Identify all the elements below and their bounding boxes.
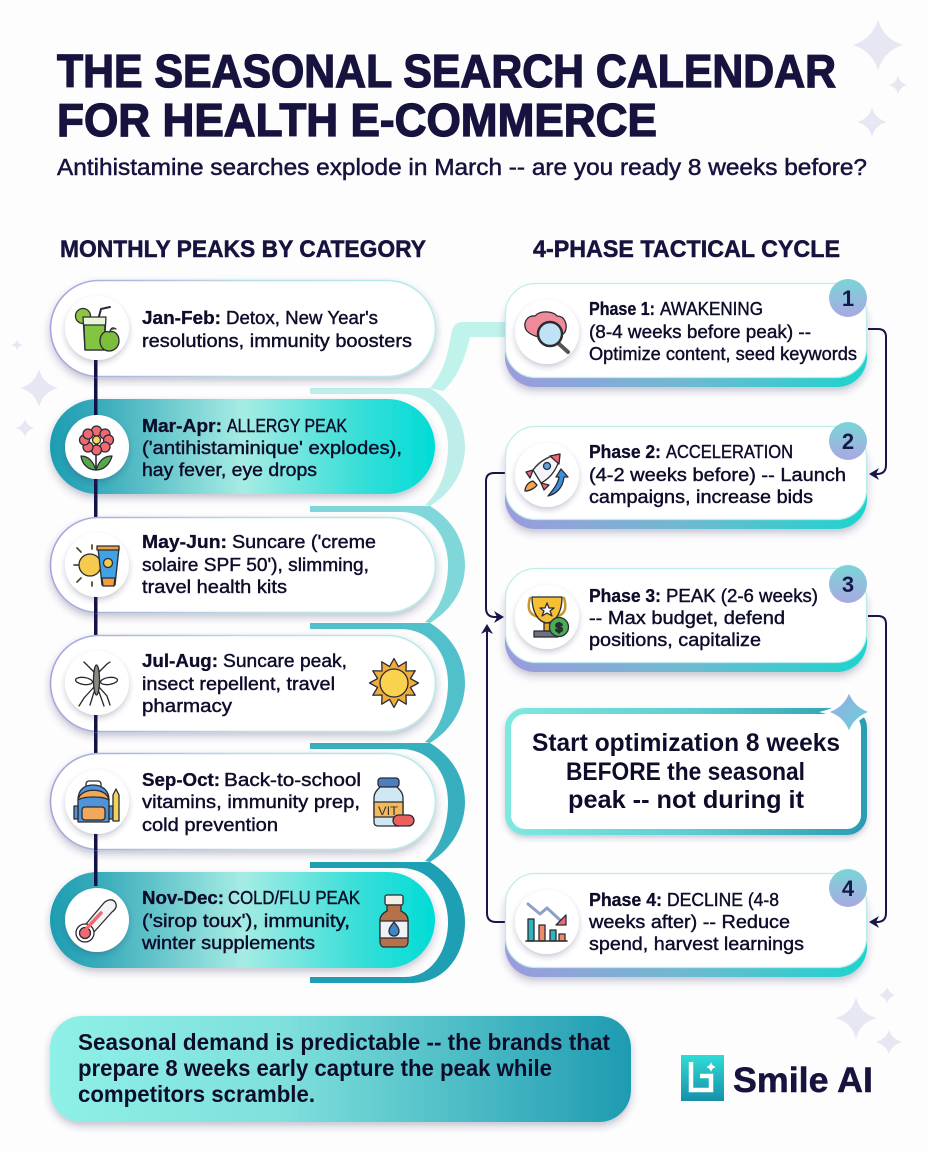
text: Nov-Dec: [141, 887, 361, 953]
text: Sep-Oct: cold prevention: [142, 814, 278, 835]
text: phase 4: spend, harvest learnings: [589, 933, 804, 954]
text: phase 3: PEAK (2-6 weeks): [666, 585, 818, 606]
text: May-Jun: travel health kits: [142, 576, 287, 597]
text: phase 2: ACCELERATION: [666, 441, 793, 462]
timeline line: [94, 355, 98, 885]
icon: mosquito: [75, 662, 118, 706]
text: phase 1: Optimize content, seed keywords: [589, 343, 857, 364]
connector brackets behind month cards: [310, 322, 505, 983]
panel: May-Jun: [50, 518, 436, 613]
text: Mar-Apr: hay fever, eye drops: [142, 459, 317, 480]
banner text: [78, 1029, 610, 1107]
icon: trophy: $: [555, 620, 563, 635]
text: Jan-Feb: [142, 307, 412, 351]
title: [57, 45, 836, 146]
callout text: BEFORE the seasonal: [566, 758, 805, 786]
text: Sep-Oct: vitamins, immunity prep,: [142, 791, 360, 812]
arrow: phase 1 to phase 2: [868, 329, 886, 480]
arrow: phase 4 back to phase 3: [481, 624, 505, 922]
text: Sep-Oct: [142, 769, 361, 835]
icon: rocket: [525, 454, 568, 496]
icon: trophy: [529, 597, 568, 637]
banner text: Seasonal demand is predictable -- the brands that: [78, 1029, 610, 1055]
badge: 3: 3: [842, 572, 854, 597]
text: phase 2: (4-2 weeks before) -- Launch: [589, 464, 846, 485]
badge: 4: [829, 869, 867, 907]
icon: vitamin bottle: VIT: [378, 804, 399, 818]
heading: tactical cycle: 4-PHASE TACTICAL CYCLE: [533, 236, 840, 263]
text: May-Jun: May-Jun:: [142, 531, 227, 552]
callout text: peak -- not during it: [568, 786, 805, 814]
text: Jan-Feb: resolutions, immunity boosters: [142, 330, 412, 351]
text: Nov-Dec: Nov-Dec:: [142, 887, 224, 908]
arrow: phase 3 to phase 4: [868, 616, 886, 928]
icon: green juice and apple: [76, 307, 119, 351]
text: phase 4: weeks after) -- Reduce: [588, 911, 790, 932]
text: Jul-Aug: Suncare peak,: [223, 650, 347, 671]
logo: Smile AI: Smile AI: [733, 1061, 873, 1100]
arrow: phase 2 to phase 3: [486, 473, 505, 623]
panel: phase 1: [505, 279, 867, 387]
text: May-Jun: Suncare ('creme: [232, 531, 376, 552]
icon: brain and magnifier: [525, 312, 568, 352]
icon: sparkle: [825, 689, 873, 735]
text: phase 1: [589, 298, 857, 364]
title: FOR HEALTH E-COMMERCE: [57, 94, 657, 146]
text: Mar-Apr: Mar-Apr:: [142, 415, 222, 436]
panel: Nov-Dec cold and flu peak: [50, 872, 435, 968]
text: phase 1: (8-4 weeks before peak) --: [589, 321, 811, 342]
text: Nov-Dec: COLD/FLU PEAK: [228, 887, 361, 908]
text: May-Jun: [142, 531, 376, 597]
panel: Jul-Aug: [50, 636, 436, 732]
text: phase 4: Phase 4:: [589, 889, 662, 910]
text: Jul-Aug: pharmacy: [142, 695, 233, 716]
text: Jul-Aug: insect repellent, travel: [142, 673, 335, 694]
callout text: Start optimization 8 weeks: [532, 729, 840, 757]
text: Jul-Aug: Jul-Aug:: [142, 650, 218, 671]
text: phase 2: Phase 2:: [589, 441, 661, 462]
text: phase 4: DECLINE (4-8: [667, 889, 779, 910]
text: phase 3: positions, capitalize: [589, 629, 761, 650]
subtitle: Antihistamine searches explode in March -- are you ready 8 weeks before?: [57, 154, 867, 180]
text: Jul-Aug: [142, 650, 347, 716]
callout: start optimization: [508, 689, 873, 832]
text: phase 1: AWAKENING: [660, 298, 763, 319]
panel: Jan-Feb: [50, 280, 436, 377]
decorative sparkles left: [11, 340, 58, 437]
text: Nov-Dec: winter supplements: [141, 932, 315, 953]
panel: phase 2: [505, 422, 867, 529]
logo: Smile AI: [681, 1055, 873, 1101]
badge: 1: [829, 279, 867, 317]
text: phase 3: Phase 3:: [589, 585, 661, 606]
text: phase 2: campaigns, increase bids: [589, 486, 813, 507]
icon: declining chart: [526, 904, 567, 941]
text: Jan-Feb: Detox, New Year's: [226, 307, 378, 328]
banner text: competitors scramble.: [78, 1081, 315, 1107]
badge: 2: 2: [842, 429, 854, 454]
icon: sun and sunscreen: [74, 545, 119, 586]
text: Mar-Apr: ('antihistaminique' explodes),: [142, 437, 402, 458]
decorative sparkles top right: [853, 20, 907, 137]
badge: 1: 1: [842, 286, 854, 311]
badge: 3: [829, 565, 867, 603]
icon: backpack and pencil: [74, 781, 119, 822]
text: May-Jun: solaire SPF 50'), slimming,: [142, 554, 369, 575]
icon: vitamin bottle: [374, 778, 414, 826]
title: THE SEASONAL SEARCH CALENDAR: [57, 45, 836, 97]
heading: monthly peaks: MONTHLY PEAKS BY CATEGORY: [60, 236, 426, 263]
text: Sep-Oct: Sep-Oct:: [142, 769, 220, 790]
panel: phase 4: [505, 869, 867, 977]
text: phase 1: Phase 1:: [589, 298, 655, 319]
text: Mar-Apr: [142, 415, 402, 480]
icon: flower: [80, 426, 114, 470]
text: phase 3: [589, 585, 818, 650]
text: Jan-Feb: Jan-Feb:: [142, 307, 221, 328]
text: Mar-Apr: ALLERGY PEAK: [227, 415, 348, 436]
banner text: prepare 8 weeks early capture the peak while: [78, 1055, 552, 1081]
panel: Mar-Apr allergy peak: [50, 399, 435, 494]
badge: 4: 4: [842, 876, 855, 901]
panel: Sep-Oct: [50, 754, 436, 850]
icon: thermometer: [76, 900, 116, 942]
text: phase 2: [589, 441, 846, 507]
decorative sparkles bottom right: [835, 987, 902, 1054]
badge: 2: [829, 422, 867, 460]
icon: syrup bottle: [380, 895, 408, 947]
panel: phase 3: [505, 565, 867, 672]
text: phase 4: [588, 889, 804, 954]
banner: takeaway: [50, 1016, 631, 1122]
text: Nov-Dec: ('sirop toux'), immunity,: [142, 910, 350, 931]
logo mark: [681, 1055, 724, 1101]
text: phase 3: -- Max budget, defend: [589, 607, 785, 628]
callout text: [532, 729, 840, 814]
text: Sep-Oct: Back-to-school: [224, 769, 361, 790]
icon: sun: [370, 658, 418, 708]
